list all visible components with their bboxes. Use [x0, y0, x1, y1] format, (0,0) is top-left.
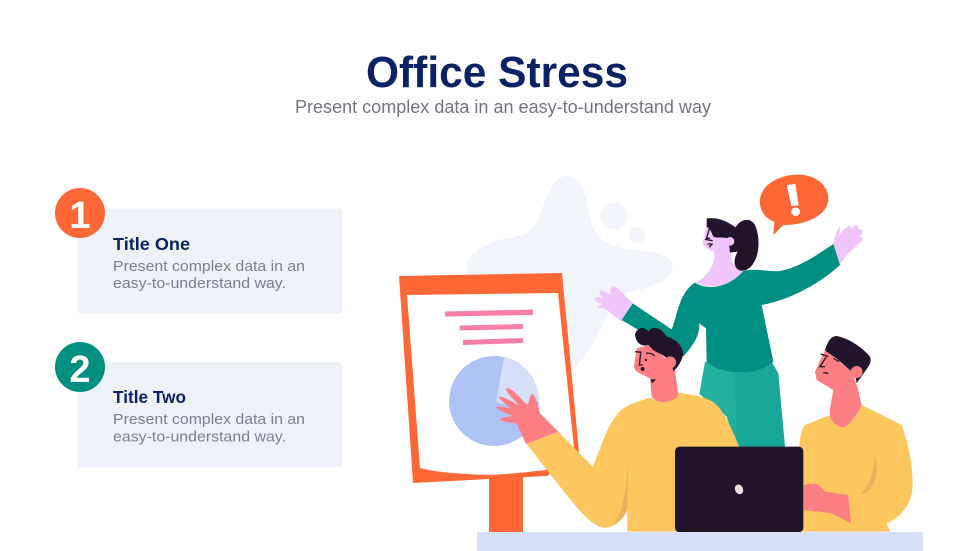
woman sweater — [622, 244, 840, 372]
illustration: office presentation scene — [399, 175, 923, 551]
right man sweater — [799, 405, 913, 532]
table — [477, 532, 923, 551]
left man hair — [635, 328, 683, 371]
figures, drawn in a 3x local grid — [496, 175, 913, 532]
number badge one — [55, 188, 105, 238]
left man facial features — [635, 352, 655, 365]
man on left pointing at chart — [496, 328, 743, 532]
board stand — [489, 470, 523, 534]
woman hands — [595, 225, 863, 322]
subtitle: Present complex data in an easy-to-understand way — [295, 97, 711, 117]
left man sweater and arm — [527, 393, 743, 532]
text block: description two: easy-to-understand way. — [113, 428, 286, 446]
text block: description one: Present complex data in an — [113, 258, 305, 275]
woman trousers — [699, 362, 785, 450]
woman face and neck — [696, 227, 743, 286]
card background two — [78, 362, 342, 468]
laptop — [675, 447, 803, 532]
left man mouth and eye — [641, 359, 656, 383]
board paper — [407, 293, 574, 475]
pie chart — [449, 356, 539, 446]
left man face and neck — [634, 345, 678, 402]
chart title lines — [445, 310, 533, 345]
right man ear — [851, 366, 863, 378]
left man pointing hand — [496, 388, 558, 444]
number badge two: 2 — [69, 349, 91, 391]
presentation board — [399, 273, 579, 534]
text block: description one: easy-to-understand way. — [113, 275, 286, 292]
board frame — [399, 273, 579, 483]
card background one — [78, 208, 342, 314]
man on right — [799, 336, 913, 532]
heading: title two: Title Two — [113, 387, 186, 407]
left man ear — [664, 356, 676, 368]
right man face and neck — [815, 350, 862, 427]
speech bubble with exclamation — [760, 175, 828, 235]
title: Office Stress — [366, 48, 628, 97]
woman ear — [726, 237, 734, 246]
left man sleeve shadow — [613, 463, 628, 525]
text block: description two — [113, 411, 305, 446]
panel: item two — [55, 342, 342, 468]
number badge one: 1 — [69, 195, 91, 237]
number badge two — [55, 342, 105, 392]
background blob — [467, 176, 672, 368]
panel: item one — [55, 188, 342, 314]
right man hand — [803, 484, 851, 523]
woman hair and ponytail — [707, 218, 759, 271]
right man sleeve shadow — [860, 457, 877, 495]
woman facial features — [705, 228, 713, 247]
heading: title one: Title One — [113, 234, 190, 254]
right man facial features — [820, 354, 839, 373]
text block: description two: Present complex data in an — [113, 411, 305, 428]
right man hair — [825, 336, 871, 383]
woman presenting — [595, 218, 863, 450]
text block: description one — [113, 258, 305, 292]
